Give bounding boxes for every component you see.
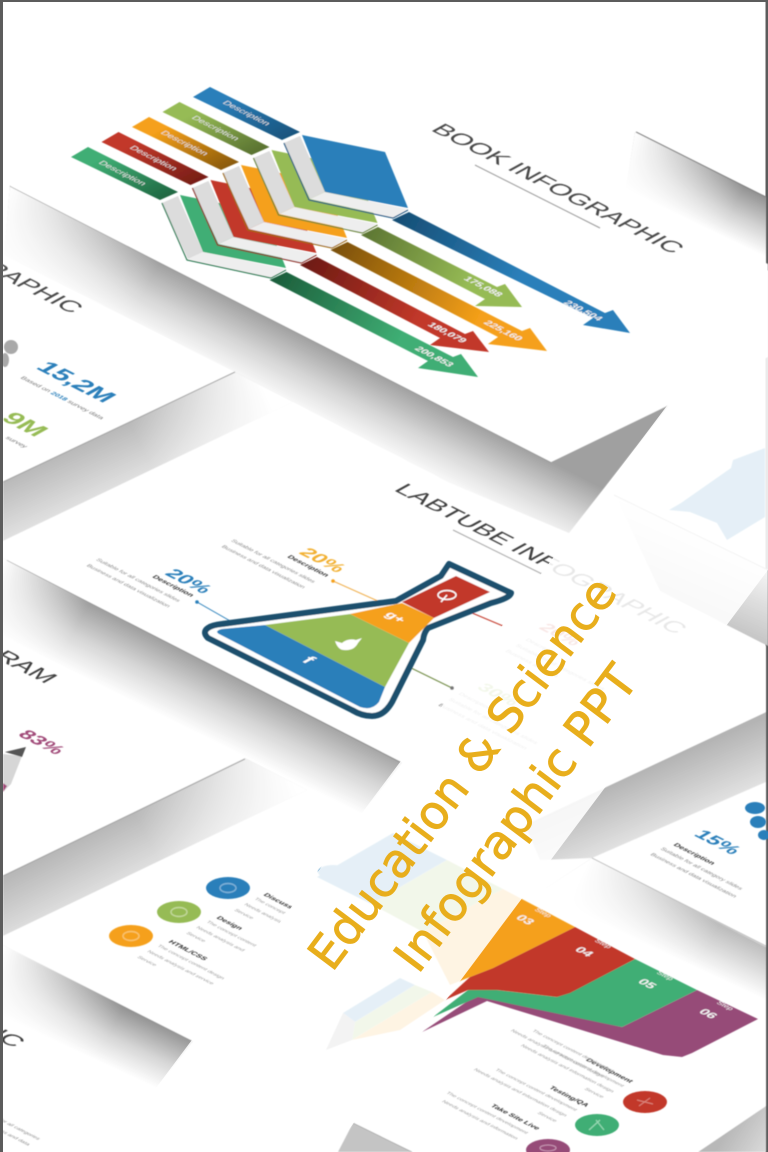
flask segment: red	[402, 576, 490, 618]
panel: population graphic	[0, 249, 122, 449]
panel: funnel steps	[109, 833, 758, 1152]
shadow: labtube slide right edge	[525, 712, 766, 960]
stat: 83%: 83%	[13, 728, 70, 757]
list item: html/css: Service	[135, 955, 158, 967]
label: right side values: Business and data	[503, 649, 560, 678]
panel: book infographic	[71, 87, 689, 377]
label: blue 20%: 20%	[160, 567, 217, 596]
arrow values: 200,853	[412, 346, 456, 369]
label: blue 20%: Description	[150, 574, 197, 598]
funnel slide lower edge	[353, 1123, 412, 1152]
list item: design: Service	[184, 931, 207, 943]
list: development: The concept content development	[540, 1044, 625, 1088]
funnel step 01	[317, 833, 447, 904]
list: development: Development	[584, 1057, 636, 1084]
list item: design: The concept content	[204, 920, 257, 948]
title: Infographic PPT	[384, 655, 649, 982]
list item: discuss: The concept	[252, 897, 286, 915]
icon: pale robot silhouette	[669, 448, 765, 540]
orange arrow	[330, 242, 547, 351]
panel: pencil diagram	[0, 618, 70, 792]
slide: population graphic	[3, 255, 235, 482]
label: blue 20%	[84, 558, 217, 608]
label: orange 20%	[219, 539, 351, 589]
funnel step 03	[423, 889, 575, 985]
list: testing: Needs analysis and information design	[472, 1068, 568, 1117]
percent slide edge	[592, 858, 766, 946]
icon: hidden blue circle	[318, 865, 348, 879]
connector lines	[197, 581, 503, 688]
title: Education & Science	[298, 567, 628, 980]
list: development: The concept content development	[530, 1029, 615, 1073]
arrow values: 175,088	[461, 276, 505, 299]
list item: design: Design	[214, 915, 246, 931]
slide: labtube infographic base	[3, 402, 766, 825]
blue book	[193, 87, 408, 218]
funnel tail strips	[326, 978, 445, 1050]
translucent title ribbon	[108, 270, 768, 1152]
panel: bottom-left slide text	[0, 954, 42, 1147]
list item: discuss: Needs analysis	[242, 903, 283, 924]
funnel step labels	[513, 907, 736, 1020]
arrow values	[412, 276, 605, 369]
caption: 9M: survey	[3, 436, 29, 449]
flask outline	[205, 564, 511, 716]
arrow values: 180,079	[425, 322, 469, 345]
label: blue 20%: Business and data visualization	[85, 564, 171, 608]
panel: labtube infographic	[84, 481, 692, 751]
slide: pencil diagram	[3, 636, 245, 876]
body copy: Business and data visualization	[648, 852, 739, 899]
funnel step 02	[371, 860, 503, 932]
funnel step labels: Step	[714, 1000, 736, 1011]
tab labels: Description	[220, 100, 273, 127]
label: right side values	[436, 621, 616, 751]
list item: html/css: HTML/CSS	[166, 939, 210, 962]
list: take site live: The concept content development	[444, 1091, 529, 1135]
heading: labtube infographic: LABTUBE INFOGRAPHIC	[388, 481, 692, 637]
list: testing: Service	[535, 1111, 558, 1123]
icon: twitter	[335, 638, 362, 650]
list: development	[509, 1023, 667, 1113]
label: right side values: Suitable for all categories slides	[513, 643, 606, 691]
icon: pencil	[3, 747, 26, 792]
list item: html/css: The concept content design	[155, 944, 226, 980]
shadow: book slide	[3, 186, 669, 533]
funnel step 04	[445, 927, 635, 1000]
arrow values: 225,160	[481, 320, 525, 343]
list item: discuss: Service	[232, 908, 255, 920]
slide: funnel steps base	[3, 790, 766, 1152]
label: right side values: 30%	[473, 681, 525, 708]
funnel step 06	[422, 990, 758, 1057]
label: right side values: Description	[456, 692, 493, 711]
label: blue 20%: Suitable for all categories slides	[94, 558, 181, 603]
tab labels: Description	[127, 145, 180, 172]
list: development: Service	[582, 1087, 605, 1099]
list item: discuss	[206, 877, 296, 930]
list item: html/css	[109, 925, 226, 992]
list: take site live: Take Site Live	[489, 1103, 543, 1131]
tab labels: Description	[189, 115, 242, 142]
label: right side values: Description	[523, 638, 560, 657]
shadow: percent slide	[520, 858, 766, 1030]
label: orange 20%: Business and data visualization	[220, 545, 306, 589]
funnel step labels: Step	[592, 938, 614, 949]
list: take site live	[434, 1091, 570, 1152]
flask segment: green	[265, 614, 409, 687]
slide: book infographic base	[10, 37, 768, 462]
olive arrow	[361, 227, 522, 307]
robot slide shadow	[615, 495, 768, 646]
funnel step labels: 06	[696, 1007, 721, 1020]
flask segment: blue	[217, 625, 385, 708]
frame right border	[766, 0, 768, 1152]
panel: percent circles	[648, 802, 768, 899]
tab labels: Description	[158, 130, 211, 157]
stat: 15%: 15%	[689, 828, 746, 857]
list item: discuss: Discuss	[261, 892, 296, 910]
tab labels: Description	[96, 160, 149, 187]
red book	[102, 132, 316, 263]
funnel step labels: 05	[635, 977, 660, 990]
funnel step labels: Step	[532, 907, 554, 918]
icons: blue dots	[745, 802, 768, 840]
tab labels	[96, 100, 273, 187]
green book	[71, 147, 286, 278]
funnel step labels: Step	[654, 970, 676, 981]
list item: html/css: Needs analysis and service	[145, 950, 215, 986]
arrow values: 230,504	[561, 300, 605, 323]
red arrow	[300, 257, 489, 352]
shadow: pencil slide	[3, 758, 307, 936]
funnel step 05	[433, 959, 697, 1027]
list: development: Needs analysis and information design	[519, 1044, 615, 1093]
list: testing: Testing/QA	[547, 1085, 592, 1108]
description: Description	[671, 842, 718, 866]
label: orange 20%: Suitable for all categories slides	[229, 539, 316, 584]
robot slide edge	[614, 495, 768, 570]
stat: 15,2M: 15,2M	[30, 358, 122, 406]
list item: design: Needs analysis and	[194, 926, 246, 952]
list: development: Needs analysis and information design	[509, 1029, 605, 1078]
list: testing: The concept content development	[493, 1068, 578, 1112]
shadow: funnel slide lower right	[698, 1106, 766, 1152]
orange book	[132, 117, 347, 248]
label: right side values: Business and data visualization	[436, 703, 529, 751]
blue arrow	[392, 212, 630, 333]
shadow: top-right slide	[610, 132, 766, 290]
label: right side values: 20%	[535, 621, 587, 648]
caption: 15,2M: Based on 2018 survey data	[18, 376, 105, 420]
shadow: funnel slide	[3, 945, 195, 1090]
funnel step labels: 03	[513, 913, 538, 926]
green arrow	[270, 272, 478, 377]
shadow: funnel slide bottom	[338, 1123, 412, 1152]
funnel step labels: 04	[572, 945, 598, 959]
icon: google plus: g+	[382, 610, 409, 624]
label: right side values: Suitable for all categories slides	[446, 697, 539, 745]
icon: person fragment	[1, 340, 18, 367]
shadow: labtube slide long edge	[3, 558, 402, 817]
slide: percent circles	[592, 782, 766, 946]
flask segment: orange	[350, 603, 434, 643]
list: take site live: Needs analysis and information	[440, 1100, 519, 1140]
wash below percent slide	[520, 858, 766, 1030]
connector dots	[195, 579, 454, 690]
shadow: population slide	[3, 372, 293, 541]
flask	[205, 564, 511, 716]
label: orange 20%: 20%	[294, 546, 351, 575]
icon: facebook: f	[298, 654, 321, 666]
olive book	[162, 102, 378, 233]
label: orange 20%: Description	[285, 554, 332, 578]
list: testing	[462, 1062, 619, 1136]
heading: book infographic: BOOK INFOGRAPHIC	[425, 121, 689, 257]
body copy: Suitable for all category slides	[658, 847, 744, 891]
icon: pinterest	[438, 590, 456, 602]
list item: design	[157, 901, 258, 959]
